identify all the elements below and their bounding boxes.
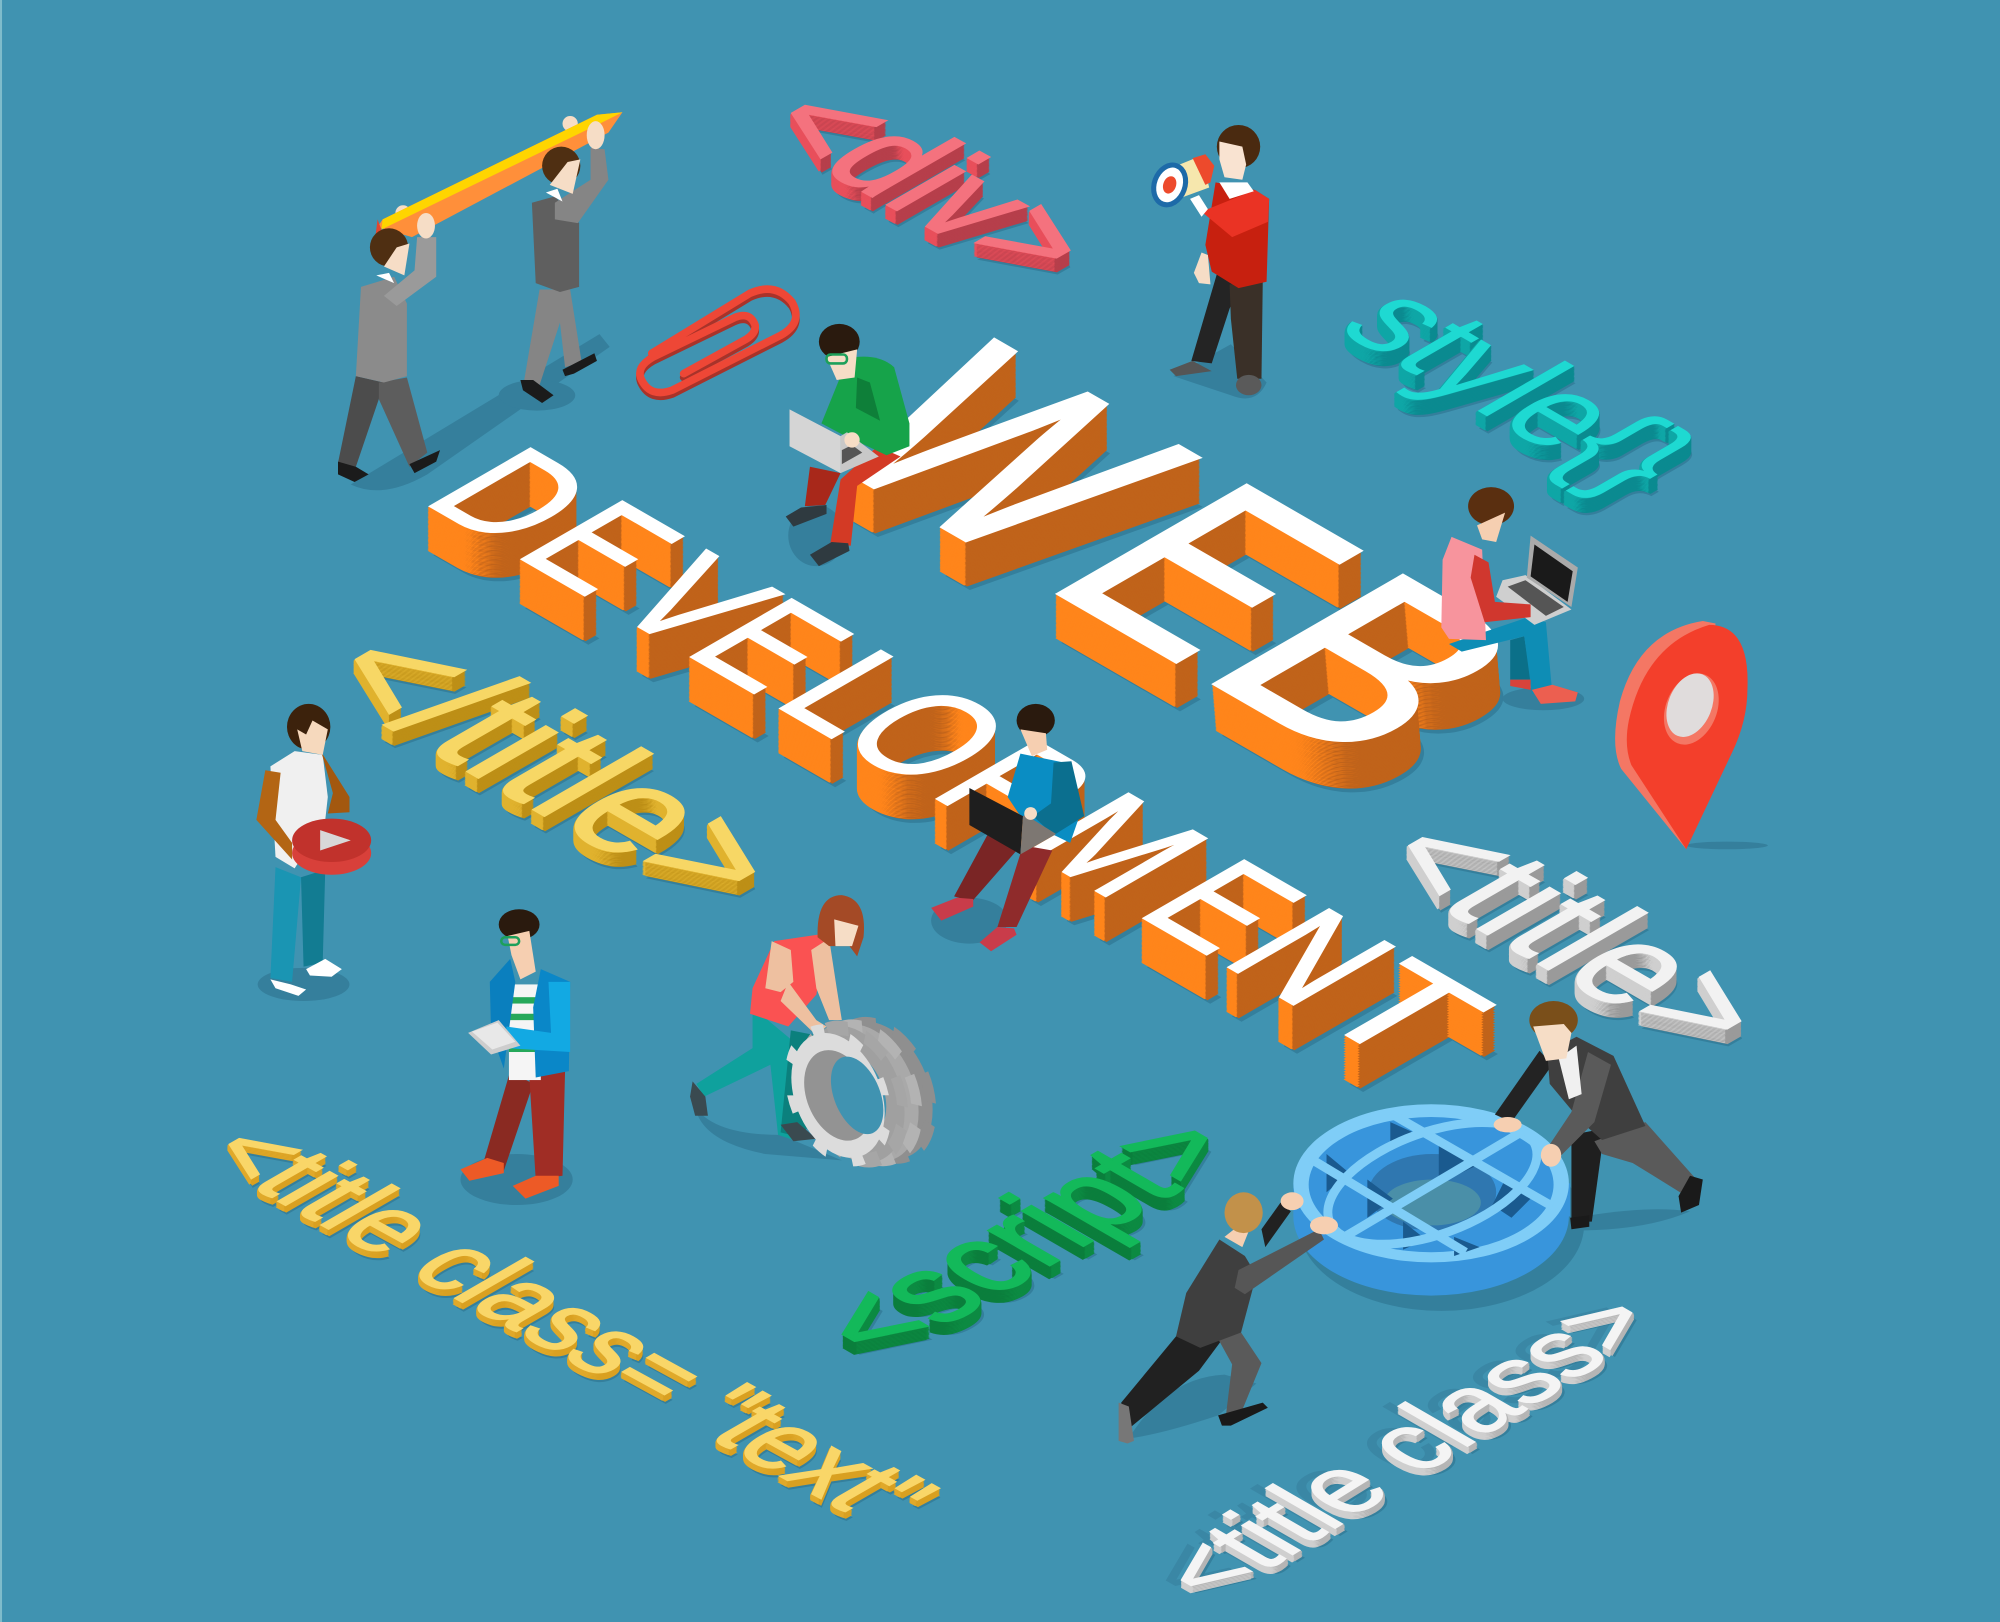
code tag: style: style{} <box>1308 266 1733 511</box>
code tag: closing title: </title> <box>276 602 839 927</box>
figure: two men carrying pencil <box>338 112 622 490</box>
icon: pencil <box>375 112 622 240</box>
code tag: title class: <title class> <box>1127 1276 1684 1616</box>
icon: globe <box>1293 1098 1584 1311</box>
figure: man with megaphone <box>1145 125 1269 398</box>
icon: play button <box>292 819 371 875</box>
heading: DEVELOPMENT: T <box>1278 937 1529 1083</box>
code tag: title class text: <title class= "text" <box>177 1107 965 1541</box>
heading: DEVELOPMENT: DEVELOPMEN <box>390 425 1440 1031</box>
figure: person in pink with laptop <box>1441 487 1584 710</box>
icon: map pin <box>1615 621 1768 849</box>
heading: WEB: B <box>1135 529 1603 799</box>
figure: woman with gear <box>690 895 949 1176</box>
icon: paperclip <box>640 289 796 396</box>
icon: gear <box>770 1009 949 1176</box>
code tag: script: <script> <box>779 1094 1269 1377</box>
figure: businessman pushing globe, right <box>1494 1001 1703 1231</box>
figure: man in green hoodie with laptop <box>786 324 909 566</box>
heading: WEB: WE <box>746 304 1443 706</box>
code tag: div: <div> <box>724 65 1140 297</box>
code tag: white title: <title> <box>1335 793 1817 1072</box>
figure: man in blue with laptop <box>931 704 1084 951</box>
heading: WEB <box>746 304 1603 799</box>
icon: megaphone <box>1145 154 1214 213</box>
figure: businessman pushing globe, left <box>1119 1192 1338 1443</box>
figure: man in white vest with play button <box>256 704 371 1001</box>
figure: man with tablet <box>460 909 573 1205</box>
